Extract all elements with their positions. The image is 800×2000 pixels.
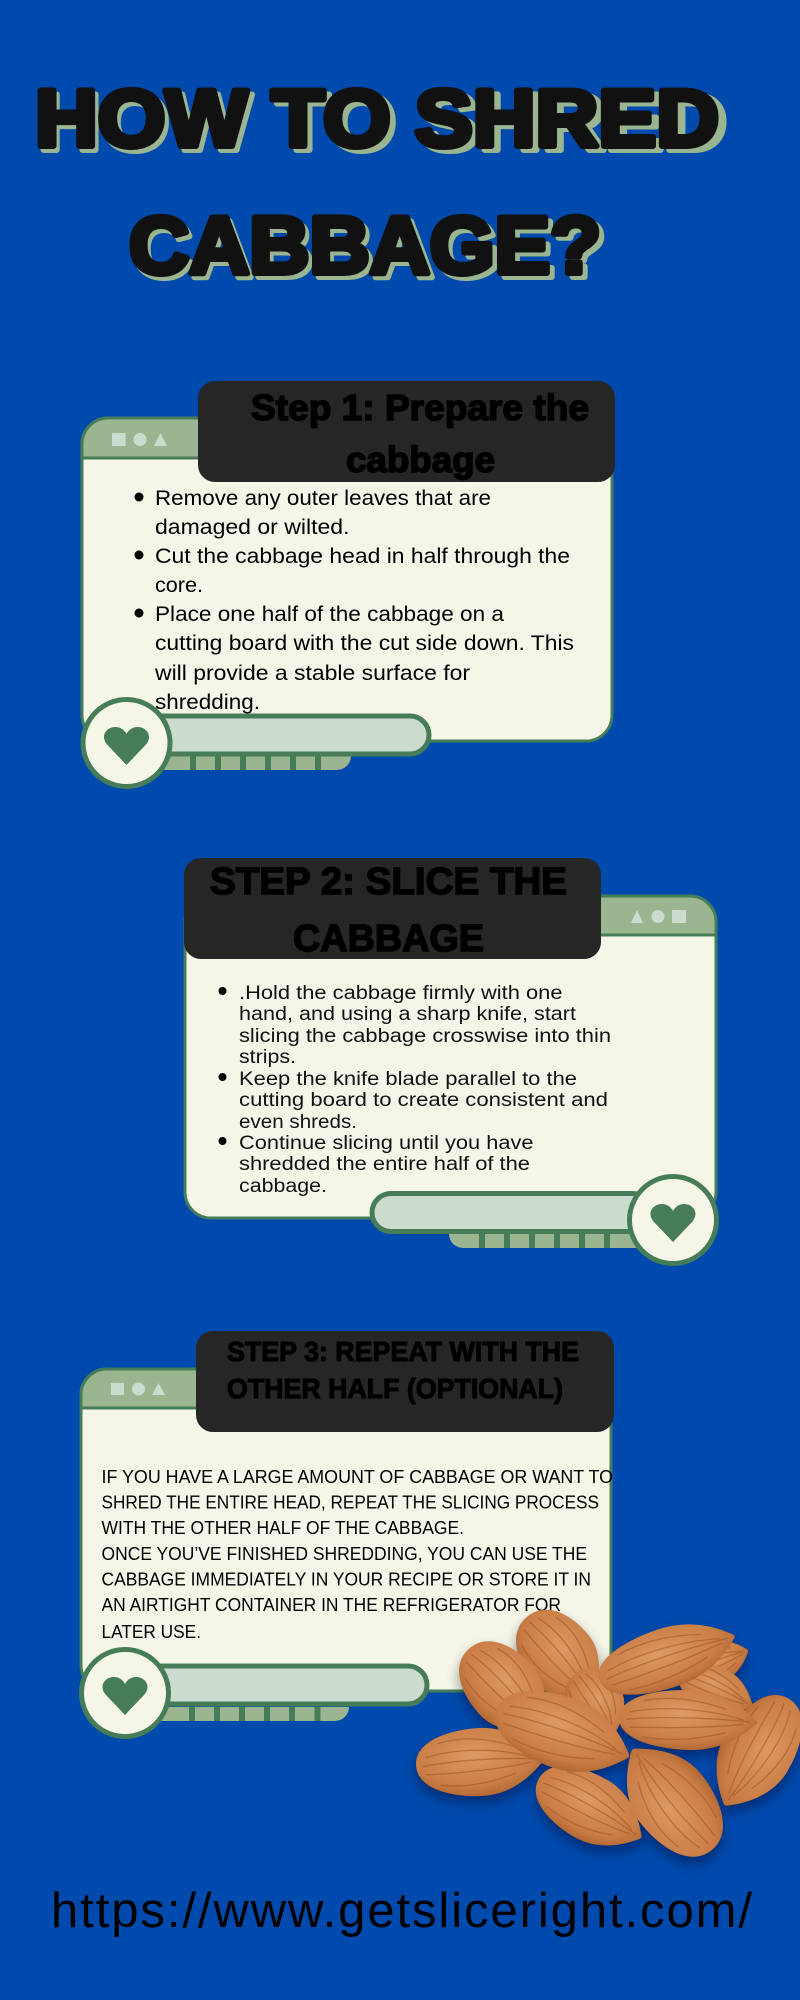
panel: step 1: [82, 381, 615, 786]
heading box: step 1: [198, 381, 615, 482]
title: CABBAGE?: [129, 201, 601, 291]
footer bar: step 1: [83, 700, 429, 786]
heading box: step 3: STEP 3: REPEAT WITH THE: [227, 1336, 579, 1367]
text: step 2 bullets: .Hold the cabbage firmly with one: [239, 983, 562, 1004]
heading box: step 3: [196, 1331, 614, 1432]
text: step 3 paragraph: CABBAGE IMMEDIATELY IN YOUR RECIPE OR STORE IT IN: [102, 1568, 591, 1590]
text: step 1 bullets: [134, 487, 574, 714]
panel: step 3: [81, 1331, 614, 1736]
text: step 3 paragraph: IF YOU HAVE A LARGE AMOUNT OF CABBAGE OR WANT TO: [102, 1466, 613, 1487]
website url: https://www.getsliceright.com/: [51, 1884, 752, 1938]
card: step 2 window: [185, 896, 716, 1218]
text: step 1 bullets: Cut the cabbage head in half through the: [155, 545, 570, 568]
text: step 2 bullets: hand, and using a sharp knife, start: [239, 1004, 577, 1025]
heading box: step 1: Step 1: Prepare the: [251, 387, 589, 428]
text: step 2 bullets: shredded the entire half of the: [239, 1154, 530, 1175]
footer bar: step 3: [82, 1650, 427, 1736]
card: step 3 window: [81, 1369, 611, 1691]
heading box: step 2: CABBAGE: [293, 918, 484, 960]
heading box: step 1: cabbage: [346, 439, 495, 480]
text: step 3 paragraph: AN AIRTIGHT CONTAINER IN THE REFRIGERATOR FOR: [102, 1594, 561, 1615]
text: step 3 paragraph: SHRED THE ENTIRE HEAD, REPEAT THE SLICING PROCESS: [102, 1492, 599, 1512]
title: CABBAGE?: [132, 205, 606, 295]
text: step 2 bullets: strips.: [239, 1047, 296, 1068]
heading box: step 2: STEP 2: SLICE THE: [210, 861, 567, 903]
title: HOW TO SHRED: [35, 74, 719, 164]
text: step 1 bullets: Place one half of the cabbage on a: [155, 603, 504, 626]
text: step 2 bullets: Keep the knife blade parallel to the: [239, 1069, 577, 1090]
text: step 2 bullets: cutting board to create consistent and: [239, 1090, 608, 1111]
heading box: step 3: OTHER HALF (OPTIONAL): [227, 1373, 563, 1404]
text: step 1 bullets: shredding.: [155, 691, 260, 714]
text: step 3 paragraph: ONCE YOU’VE FINISHED SHREDDING, YOU CAN USE THE: [102, 1543, 587, 1564]
text: step 1 bullets: Remove any outer leaves that are: [155, 487, 491, 510]
text: step 2 bullets: slicing the cabbage crosswise into thin: [239, 1026, 611, 1047]
text: step 1 bullets: cutting board with the cut side down. This: [155, 632, 574, 655]
text: step 2 bullets: [218, 983, 611, 1197]
text: step 2 bullets: cabbage.: [239, 1176, 327, 1197]
heading box: step 2: [184, 858, 601, 960]
title: HOW TO SHRED: [38, 78, 727, 168]
text: step 1 bullets: core.: [155, 574, 203, 597]
card: step 1 window: [82, 418, 612, 741]
text: step 1 bullets: damaged or wilted.: [155, 516, 350, 539]
footer bar: step 2: [372, 1176, 716, 1264]
text: step 3 paragraph: [102, 1466, 613, 1642]
text: step 3 paragraph: WITH THE OTHER HALF OF THE CABBAGE.: [102, 1517, 464, 1538]
panel: step 2: [184, 858, 716, 1264]
text: step 2 bullets: Continue slicing until you have: [239, 1133, 534, 1154]
text: step 2 bullets: even shreds.: [239, 1112, 357, 1133]
text: step 3 paragraph: LATER USE.: [102, 1621, 201, 1642]
illustration: almonds: [414, 1594, 800, 1874]
text: step 1 bullets: will provide a stable surface for: [154, 662, 470, 685]
title: [35, 74, 727, 295]
